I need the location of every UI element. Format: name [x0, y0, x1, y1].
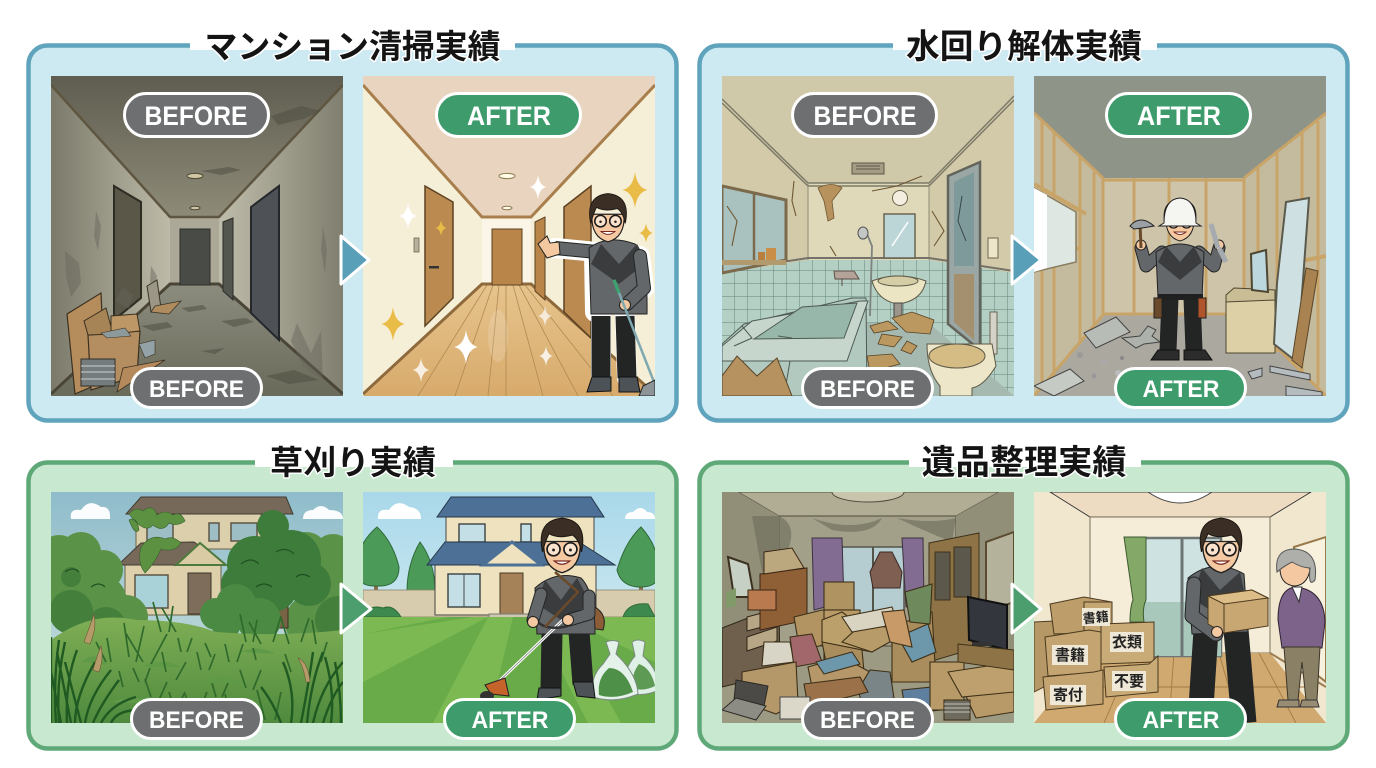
panel: 草刈り実績 [28, 444, 676, 748]
label: BEFORE bottom: BEFORE [820, 376, 915, 403]
before image: damaged bathroom [722, 76, 1014, 396]
elderly client [1277, 549, 1325, 707]
heading: マンション清掃実績: マンション清掃実績 [204, 28, 500, 65]
panel: マンション清掃実績 [28, 28, 676, 420]
after image: stripped bathroom with worker [1034, 76, 1326, 396]
label: BEFORE bottom [802, 368, 932, 408]
house [427, 497, 615, 619]
label: BEFORE [802, 700, 932, 738]
before image: overgrown garden [51, 492, 343, 723]
label: BEFORE [132, 700, 262, 738]
stacked labeled boxes [1034, 597, 1158, 710]
label: BEFORE top: BEFORE [144, 101, 248, 131]
label: AFTER bottom [1116, 368, 1246, 408]
television [958, 597, 1014, 670]
label: AFTER top: AFTER [1137, 101, 1221, 131]
panel: 水回り解体実績 [700, 29, 1348, 420]
after image: tidy room with boxes [1034, 492, 1326, 723]
toilet [927, 344, 996, 396]
overgrown trees and shrubs [51, 510, 343, 634]
label: 寄付: 寄付 [1053, 686, 1083, 704]
arrow [1012, 584, 1041, 633]
label: 書籍 top: 書籍 [1082, 609, 1109, 626]
label: AFTER top: AFTER [467, 101, 551, 131]
worker holding a box [1188, 518, 1268, 723]
label: AFTER [444, 700, 574, 738]
label: AFTER: AFTER [472, 707, 548, 734]
label: 衣類: 衣類 [1112, 633, 1142, 651]
heading: 水回り解体実績: 水回り解体実績 [906, 29, 1142, 66]
worker with hammer and wrench [1130, 198, 1226, 360]
heading: 草刈り実績: 草刈り実績 [270, 444, 436, 481]
label: AFTER top [1106, 94, 1250, 136]
heading: 遺品整理実績: 遺品整理実績 [922, 444, 1126, 482]
label: BEFORE: BEFORE [149, 707, 244, 734]
label: BEFORE bottom: BEFORE [149, 376, 244, 403]
worker with string trimmer [480, 518, 604, 701]
label: AFTER [1116, 700, 1246, 738]
before image: dirty apartment corridor [51, 76, 343, 396]
label: 不要: 不要 [1114, 673, 1144, 690]
label: AFTER: AFTER [1142, 707, 1220, 734]
laptop [722, 680, 768, 720]
label: AFTER bottom: AFTER [1142, 376, 1220, 403]
label: BEFORE: BEFORE [820, 707, 915, 734]
after image: mowed lawn with worker [355, 492, 659, 723]
worker with mop [538, 194, 655, 396]
label: BEFORE top [124, 94, 268, 136]
label: BEFORE top: BEFORE [814, 101, 916, 131]
arrow [1012, 236, 1041, 284]
pile of cardboard boxes [742, 582, 1014, 720]
arrow [341, 584, 371, 633]
after image: clean corridor with worker [363, 76, 655, 396]
before image: cluttered room [722, 482, 1014, 723]
label: 書籍: 書籍 [1055, 646, 1085, 664]
bags of grass [592, 640, 659, 700]
trees [363, 526, 655, 590]
label: BEFORE top [792, 94, 936, 136]
debris and removed fixtures [1034, 198, 1322, 396]
label: BEFORE bottom [132, 368, 262, 408]
label: AFTER top [436, 94, 580, 136]
panel: 遺品整理実績 [700, 444, 1348, 748]
arrow [341, 236, 369, 284]
